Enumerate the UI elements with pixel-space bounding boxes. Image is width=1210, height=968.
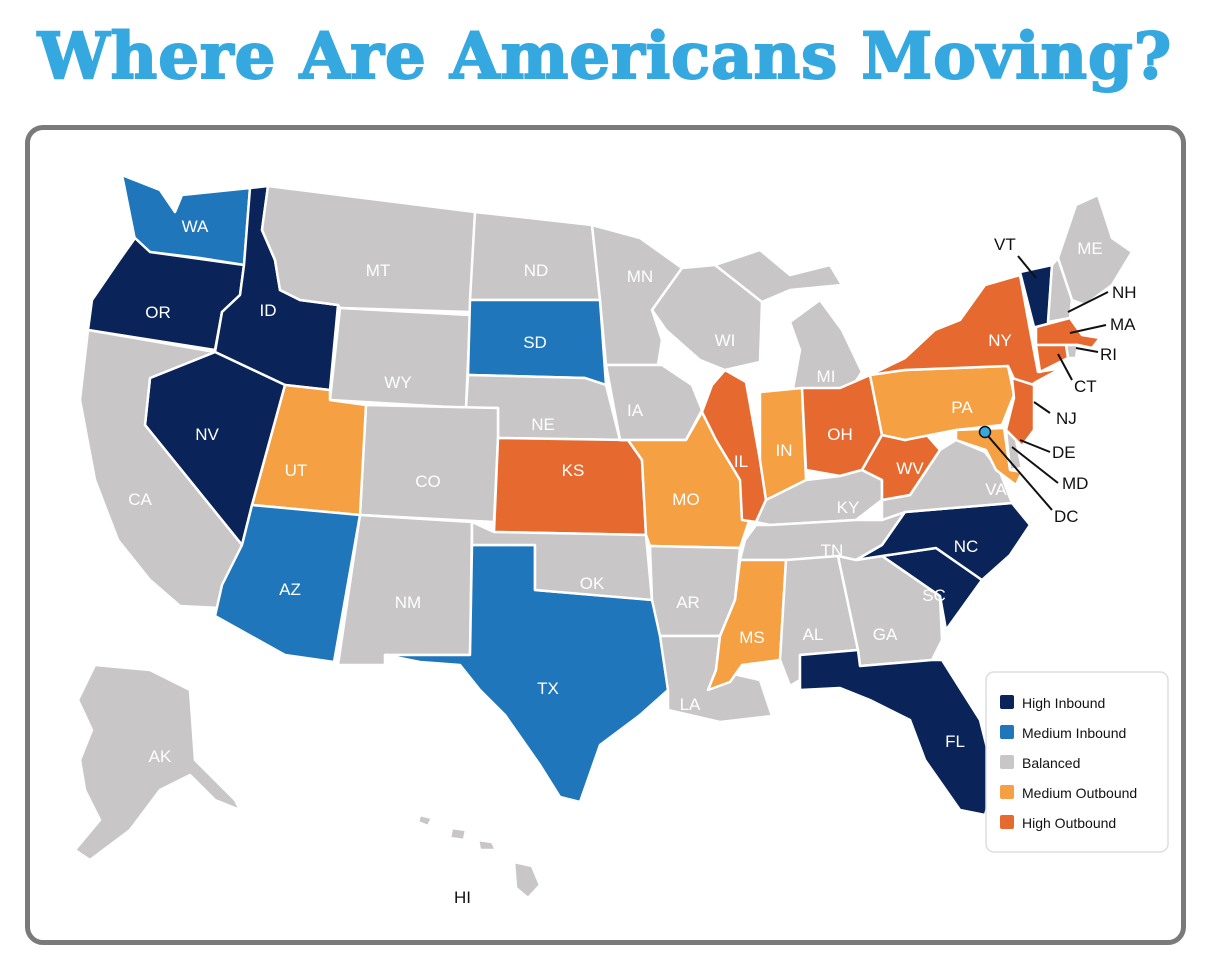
state labels: NC [954, 537, 978, 556]
state: WI [652, 265, 762, 370]
map: MD [1062, 474, 1088, 493]
map: DC [1054, 507, 1079, 526]
state: OR [88, 238, 244, 350]
state: NV [145, 352, 285, 545]
legend: Medium Outbound [1022, 785, 1137, 801]
state labels: WV [896, 459, 924, 478]
state labels: IN [776, 441, 792, 460]
state labels: ND [524, 261, 548, 280]
state: PA [870, 366, 1014, 440]
state labels: VA [985, 480, 1007, 499]
state: CA [80, 330, 242, 608]
state: OH [802, 375, 882, 476]
state labels: NE [531, 415, 555, 434]
state: IN [760, 388, 806, 500]
state: NH [1048, 258, 1072, 322]
map: DE [1052, 443, 1076, 462]
map: HI [454, 888, 471, 907]
state: NJ [1006, 378, 1034, 446]
state: ID [215, 186, 338, 390]
state labels: AK [149, 747, 172, 766]
state: WA [122, 175, 250, 265]
state: AZ [215, 505, 360, 662]
state: MT [262, 186, 475, 312]
state labels: CA [128, 490, 152, 509]
state: IL [702, 370, 766, 522]
state: NM [338, 515, 472, 665]
callout labels with leader lines [988, 256, 1108, 510]
state labels [128, 217, 1103, 766]
state labels: NM [395, 593, 421, 612]
map: RI [1100, 345, 1117, 364]
state: TN [740, 512, 905, 560]
legend [986, 672, 1168, 852]
state: MA [1036, 318, 1100, 348]
state: AK [75, 665, 240, 860]
map: MA [1110, 315, 1136, 334]
state labels: WI [715, 331, 735, 350]
state: CO [360, 405, 498, 522]
state: GA [838, 556, 942, 666]
state: VA [882, 440, 1012, 520]
state labels: SD [523, 333, 547, 352]
state: AR [650, 546, 740, 636]
state: MO [620, 412, 752, 548]
state labels: NV [195, 425, 219, 444]
state: MN [592, 225, 700, 365]
state labels: SC [922, 586, 946, 605]
state: AL [780, 556, 858, 686]
state: LA [660, 636, 772, 722]
map: NJ [1056, 409, 1077, 428]
state: ME [1058, 195, 1132, 305]
state labels: MT [366, 261, 390, 280]
state labels: TX [537, 679, 559, 698]
state labels: PA [951, 398, 973, 417]
state: CT [1036, 345, 1068, 372]
state: DE [1006, 430, 1022, 470]
map: CT [1074, 377, 1097, 396]
state: VT [1020, 265, 1052, 327]
legend: Medium Inbound [1022, 725, 1126, 741]
state: FL [800, 650, 995, 815]
state: UT [252, 385, 366, 515]
state labels: AL [803, 625, 823, 644]
state labels: IL [734, 452, 748, 471]
state labels: OK [580, 574, 605, 593]
state labels: WA [182, 217, 209, 236]
state labels: AZ [279, 580, 301, 599]
state labels: LA [680, 695, 701, 714]
legend: High Outbound [1022, 815, 1116, 831]
state labels: MS [739, 628, 765, 647]
state: NE [466, 375, 620, 440]
state: TX [385, 545, 668, 802]
state: WV [862, 434, 940, 500]
DC marker [980, 426, 990, 438]
state labels: ME [1077, 239, 1103, 258]
state labels: IA [627, 401, 644, 420]
state labels: GA [873, 625, 898, 644]
state labels: CO [415, 472, 441, 491]
state: RI [1066, 345, 1078, 358]
legend: High Inbound [1022, 695, 1105, 711]
state: OK [472, 522, 652, 600]
state: HI [418, 815, 540, 898]
map: VT [994, 235, 1016, 254]
state labels: OH [827, 425, 853, 444]
state labels: MI [817, 367, 835, 386]
state: SC [882, 548, 982, 630]
state labels: MN [627, 267, 653, 286]
state: IA [606, 365, 702, 440]
state labels: ID [260, 301, 276, 320]
state labels: NY [988, 331, 1012, 350]
state: KS [494, 438, 646, 535]
state labels: UT [285, 461, 307, 480]
title: Where Are Americans Moving? [38, 19, 1172, 94]
map: NH [1112, 283, 1137, 302]
state: ND [470, 212, 600, 300]
state labels: FL [945, 732, 965, 751]
state labels: MO [672, 490, 700, 509]
state: NY [870, 275, 1062, 392]
state labels: WY [384, 373, 412, 392]
state: MI [790, 300, 862, 394]
state: MD [956, 428, 1022, 485]
legend: Balanced [1022, 755, 1080, 771]
state: NC [856, 503, 1030, 580]
state labels: TN [821, 541, 843, 560]
state: MS [708, 560, 786, 690]
state labels: OR [145, 303, 171, 322]
state labels: KS [562, 461, 584, 480]
state: WY [330, 308, 470, 408]
state: SD [468, 300, 606, 385]
state labels: KY [837, 498, 859, 517]
state: KY [756, 470, 882, 525]
state labels: AR [676, 593, 700, 612]
